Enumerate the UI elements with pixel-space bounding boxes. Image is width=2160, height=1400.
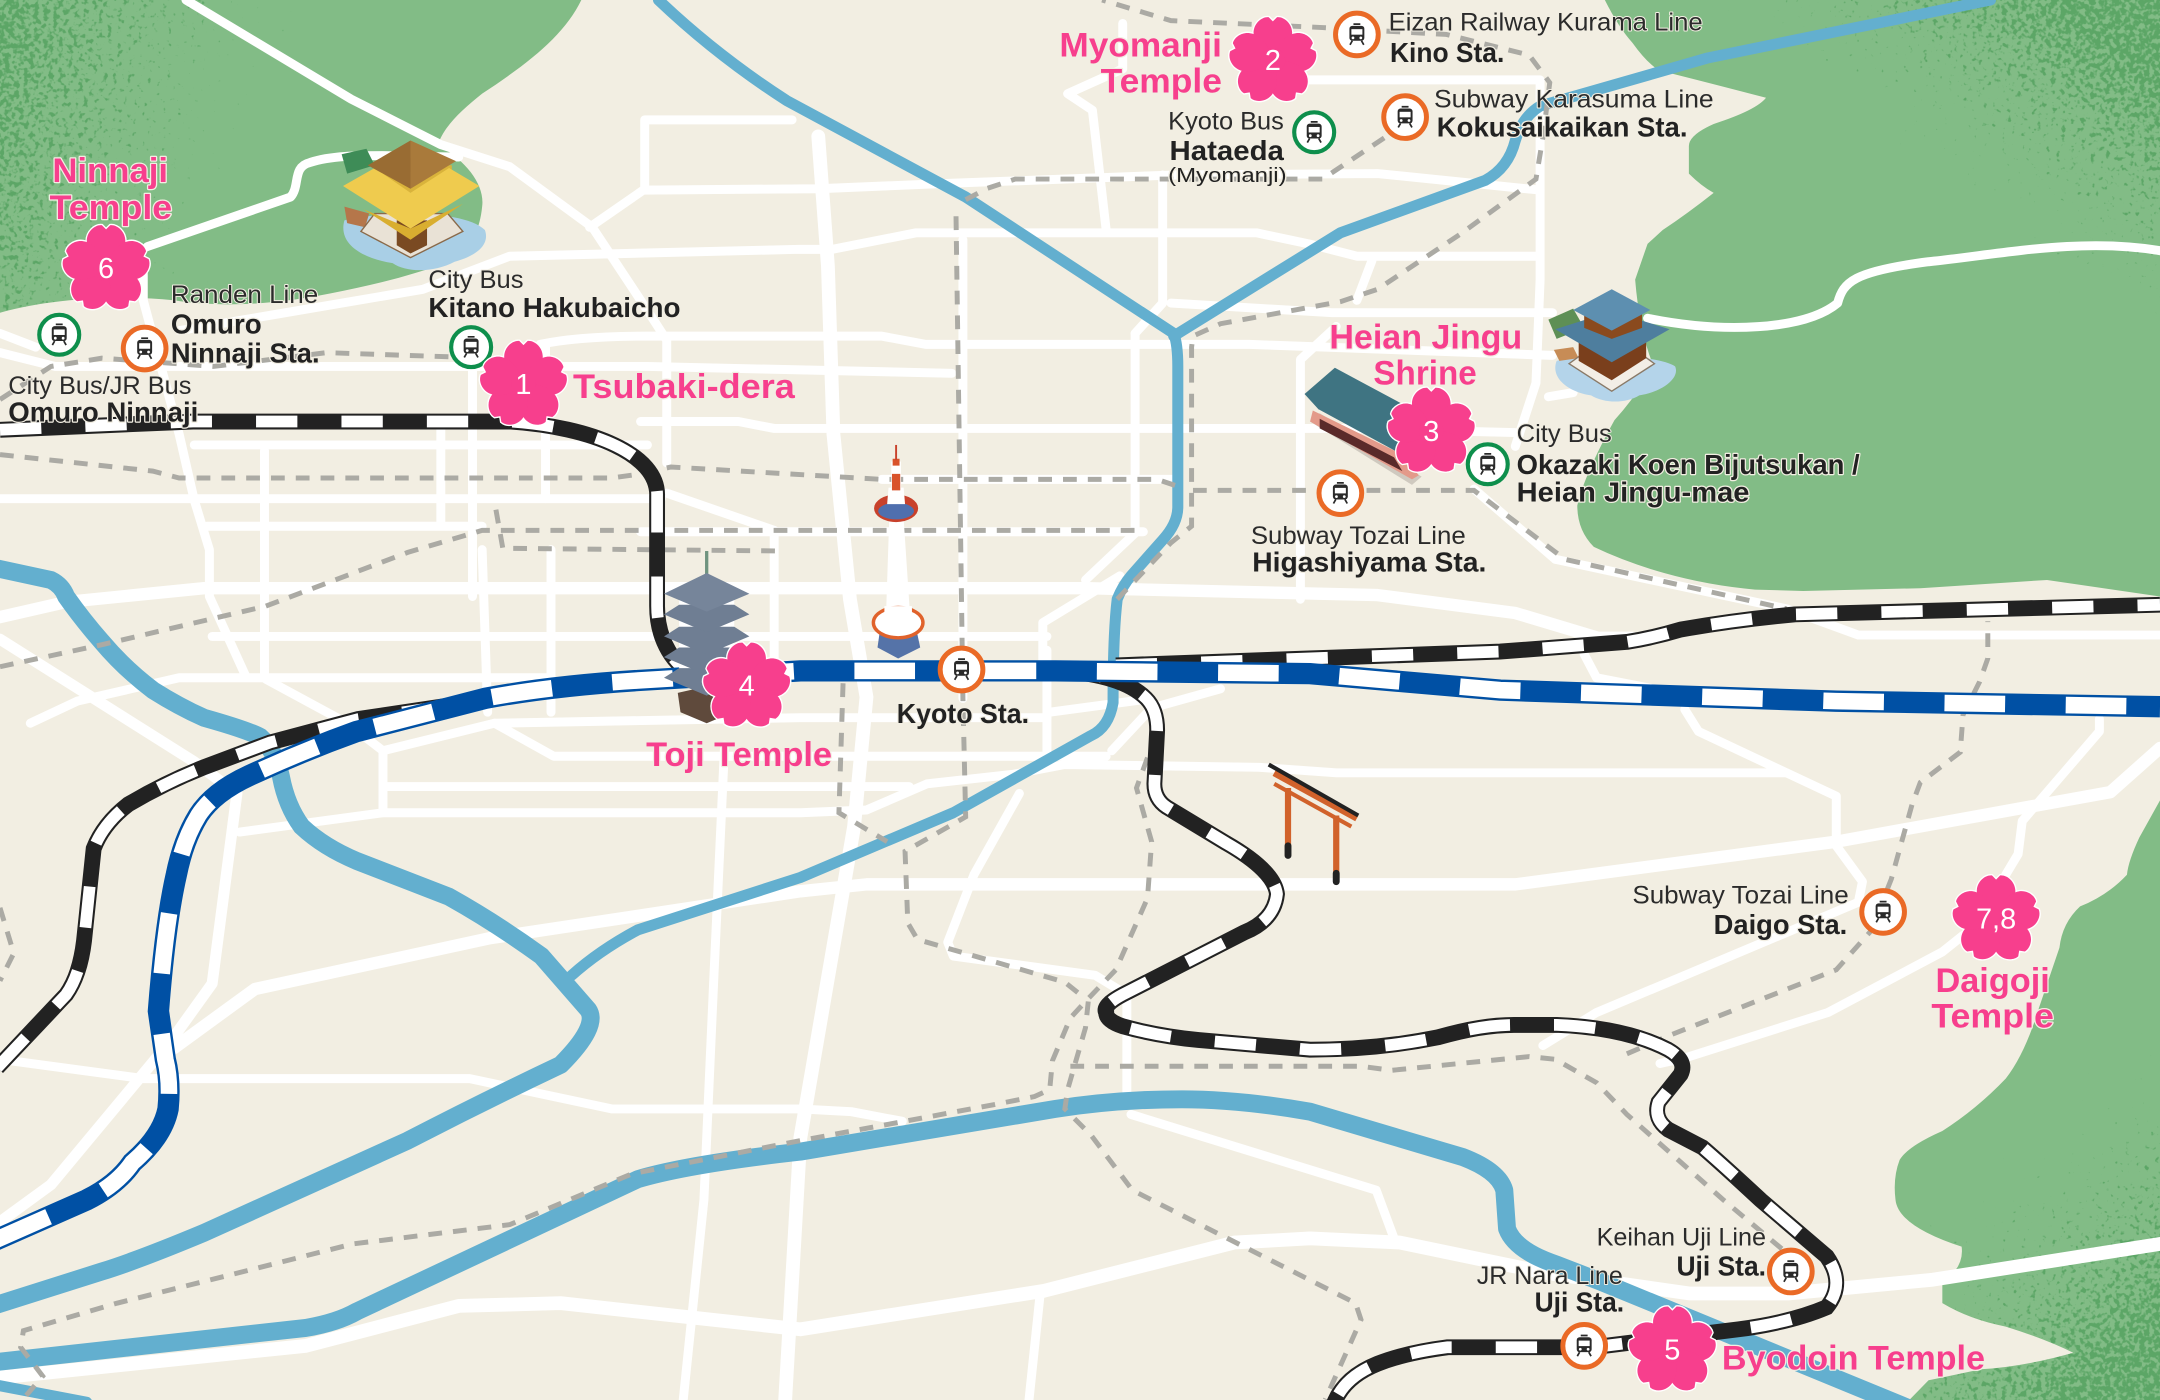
text: Hataeda bus stop: Hataeda: [1170, 135, 1285, 166]
text: Okazaki Koen bus stop: Okazaki Koen Bijutsukan /: [1517, 449, 1860, 480]
marker 5: [1625, 1307, 1720, 1396]
text: Omuro Ninnaji station: Ninnaji Sta.: [171, 337, 320, 368]
text: Omuro Ninnaji bus: City Bus/JR Bus: [8, 373, 191, 400]
label: Myomanji Temple: Temple: [1101, 62, 1222, 100]
station: Kino (orange): [1336, 13, 1378, 56]
text: Hataeda bus stop: [1168, 108, 1287, 187]
label: Ninnaji Temple: Ninnaji: [52, 152, 168, 190]
label: Daigoji Temple: Temple: [1931, 998, 2054, 1036]
marker 2: 2: [1265, 45, 1281, 77]
marker 6: [59, 225, 153, 315]
marker 4: 4: [739, 671, 755, 703]
text: Kino station: [1389, 9, 1703, 68]
marker 5: 5: [1664, 1335, 1680, 1367]
text: Omuro Ninnaji station: Omuro: [171, 308, 262, 339]
rail: JR Sanin line: [0, 422, 696, 675]
river: Kamo north branch: [572, 0, 1178, 975]
bus stop: Hataeda (green): [1294, 112, 1334, 152]
illustration: Toji pagoda: [664, 551, 749, 723]
river: west Katsura: [0, 568, 591, 1306]
text: Kokusaikaikan station: Kokusaikaikan Sta.: [1437, 111, 1688, 142]
text: Keihan Uji station: Uji Sta.: [1676, 1251, 1766, 1282]
marker 4: [699, 643, 794, 732]
station: Higashiyama (orange): [1319, 472, 1362, 515]
marker 2: [1226, 17, 1320, 107]
label: Ninnaji Temple: Temple: [50, 189, 172, 227]
text: Keihan Uji station: Keihan Uji Line: [1597, 1224, 1766, 1251]
text: Okazaki Koen bus stop: Heian Jingu-mae: [1517, 476, 1749, 507]
text: Daigo station: Subway Tozai Line: [1632, 883, 1849, 910]
text: Hataeda bus stop: (Myomanji): [1168, 164, 1287, 187]
marker 1: 1: [515, 369, 532, 401]
label: Toji Temple: Toji Temple: [646, 736, 832, 774]
railway lines: [0, 422, 2160, 1400]
text: Kino station: Eizan Railway Kurama Line: [1389, 9, 1703, 36]
label: Heian Jingu Shrine: Shrine: [1373, 354, 1477, 392]
mountain: north-east: [1577, 0, 2160, 596]
label: Heian Jingu Shrine: [1329, 319, 1522, 392]
text: Daigo station: [1632, 883, 1849, 940]
rail: Nara and Uji line: [1061, 671, 1836, 1400]
station: JR Uji (orange): [1563, 1325, 1606, 1367]
illustration: Heian pavilion: [1548, 289, 1676, 402]
text: Omuro Ninnaji station: Randen Line: [171, 282, 318, 309]
station: Kyoto (orange): [940, 648, 983, 691]
text: Kitano Hakubaicho: [428, 267, 681, 323]
text: Okazaki Koen bus stop: City Bus: [1517, 421, 1612, 448]
station: Omuro Ninnaji (orange): [123, 327, 166, 370]
mountain: south-east: [1895, 800, 2160, 1400]
text: Higashiyama station: [1251, 523, 1486, 578]
text: Kitano Hakubaicho: Kitano Hakubaicho: [428, 292, 681, 323]
marker 3: [1384, 388, 1479, 478]
bus stop: Okazaki Koen (green): [1468, 444, 1508, 484]
rail: Shinkansen blue line: [0, 671, 2160, 1241]
bus stop: Kitano Hakubaicho (green): [451, 327, 491, 367]
river: south Uji: [0, 1099, 1908, 1400]
text: Kino station: Kino Sta.: [1390, 37, 1504, 68]
station: Keihan Uji (orange): [1769, 1250, 1812, 1293]
river: south-west corner: [0, 1384, 87, 1400]
text: Omuro Ninnaji bus: Omuro Ninnaji: [8, 397, 198, 428]
text: JR Uji station: Uji Sta.: [1535, 1286, 1624, 1317]
label: Tsubaki-dera: Tsubaki-dera: [573, 368, 796, 406]
label: Heian Jingu Shrine: Heian Jingu: [1329, 319, 1522, 357]
text: JR Uji station: JR Nara Line: [1477, 1263, 1623, 1290]
text: Kokusaikaikan station: [1434, 86, 1714, 142]
text: Omuro Ninnaji bus: [8, 373, 198, 428]
illustration: Kyoto Tower: [873, 445, 923, 658]
text: Higashiyama station: Subway Tozai Line: [1251, 523, 1466, 550]
label: Daigoji Temple: [1931, 962, 2054, 1036]
text: Kokusaikaikan station: Subway Karasuma Line: [1434, 86, 1714, 113]
label: Myomanji Temple: [1059, 26, 1222, 100]
illustration: torii gate: [1269, 765, 1358, 882]
label: Myomanji Temple: Myomanji: [1059, 26, 1222, 64]
label: Daigoji Temple: Daigoji: [1935, 962, 2050, 1000]
river: north-east branch: [1174, 0, 1991, 336]
marker 7,8: [1949, 875, 2043, 965]
bus stop: Omuro Ninnaji (green): [39, 315, 79, 355]
text: Higashiyama station: Higashiyama Sta.: [1252, 547, 1486, 578]
text: Omuro Ninnaji station: [171, 282, 320, 368]
illustration: Heian Jingu hall: [1305, 368, 1422, 485]
marker 3: 3: [1423, 416, 1439, 448]
text: Hataeda bus stop: Kyoto Bus: [1168, 108, 1284, 135]
text: JR Uji station: [1477, 1263, 1624, 1317]
station: Kokusaikaikan (orange): [1384, 96, 1426, 138]
illustration: Kinkakuji golden pavilion: [342, 141, 486, 270]
label: Ninnaji Temple: [50, 152, 172, 227]
marker 1: [476, 341, 571, 431]
mountain: north-west: [0, 0, 581, 313]
label: Byodoin Temple: Byodoin Temple: [1722, 1339, 1985, 1377]
text: Kitano Hakubaicho: City Bus: [428, 267, 523, 294]
text: Keihan Uji station: [1597, 1224, 1766, 1282]
station: Daigo (orange): [1862, 891, 1904, 933]
text: Okazaki Koen bus stop: [1517, 421, 1860, 507]
marker 7,8: 7,8: [1976, 903, 2016, 935]
marker 6: 6: [98, 253, 114, 285]
text: Kyoto station: Kyoto Sta.: [897, 698, 1029, 729]
text: Daigo station: Daigo Sta.: [1714, 909, 1847, 940]
rail: west black line: [0, 703, 468, 1068]
rail: east black line: [1116, 605, 2160, 665]
